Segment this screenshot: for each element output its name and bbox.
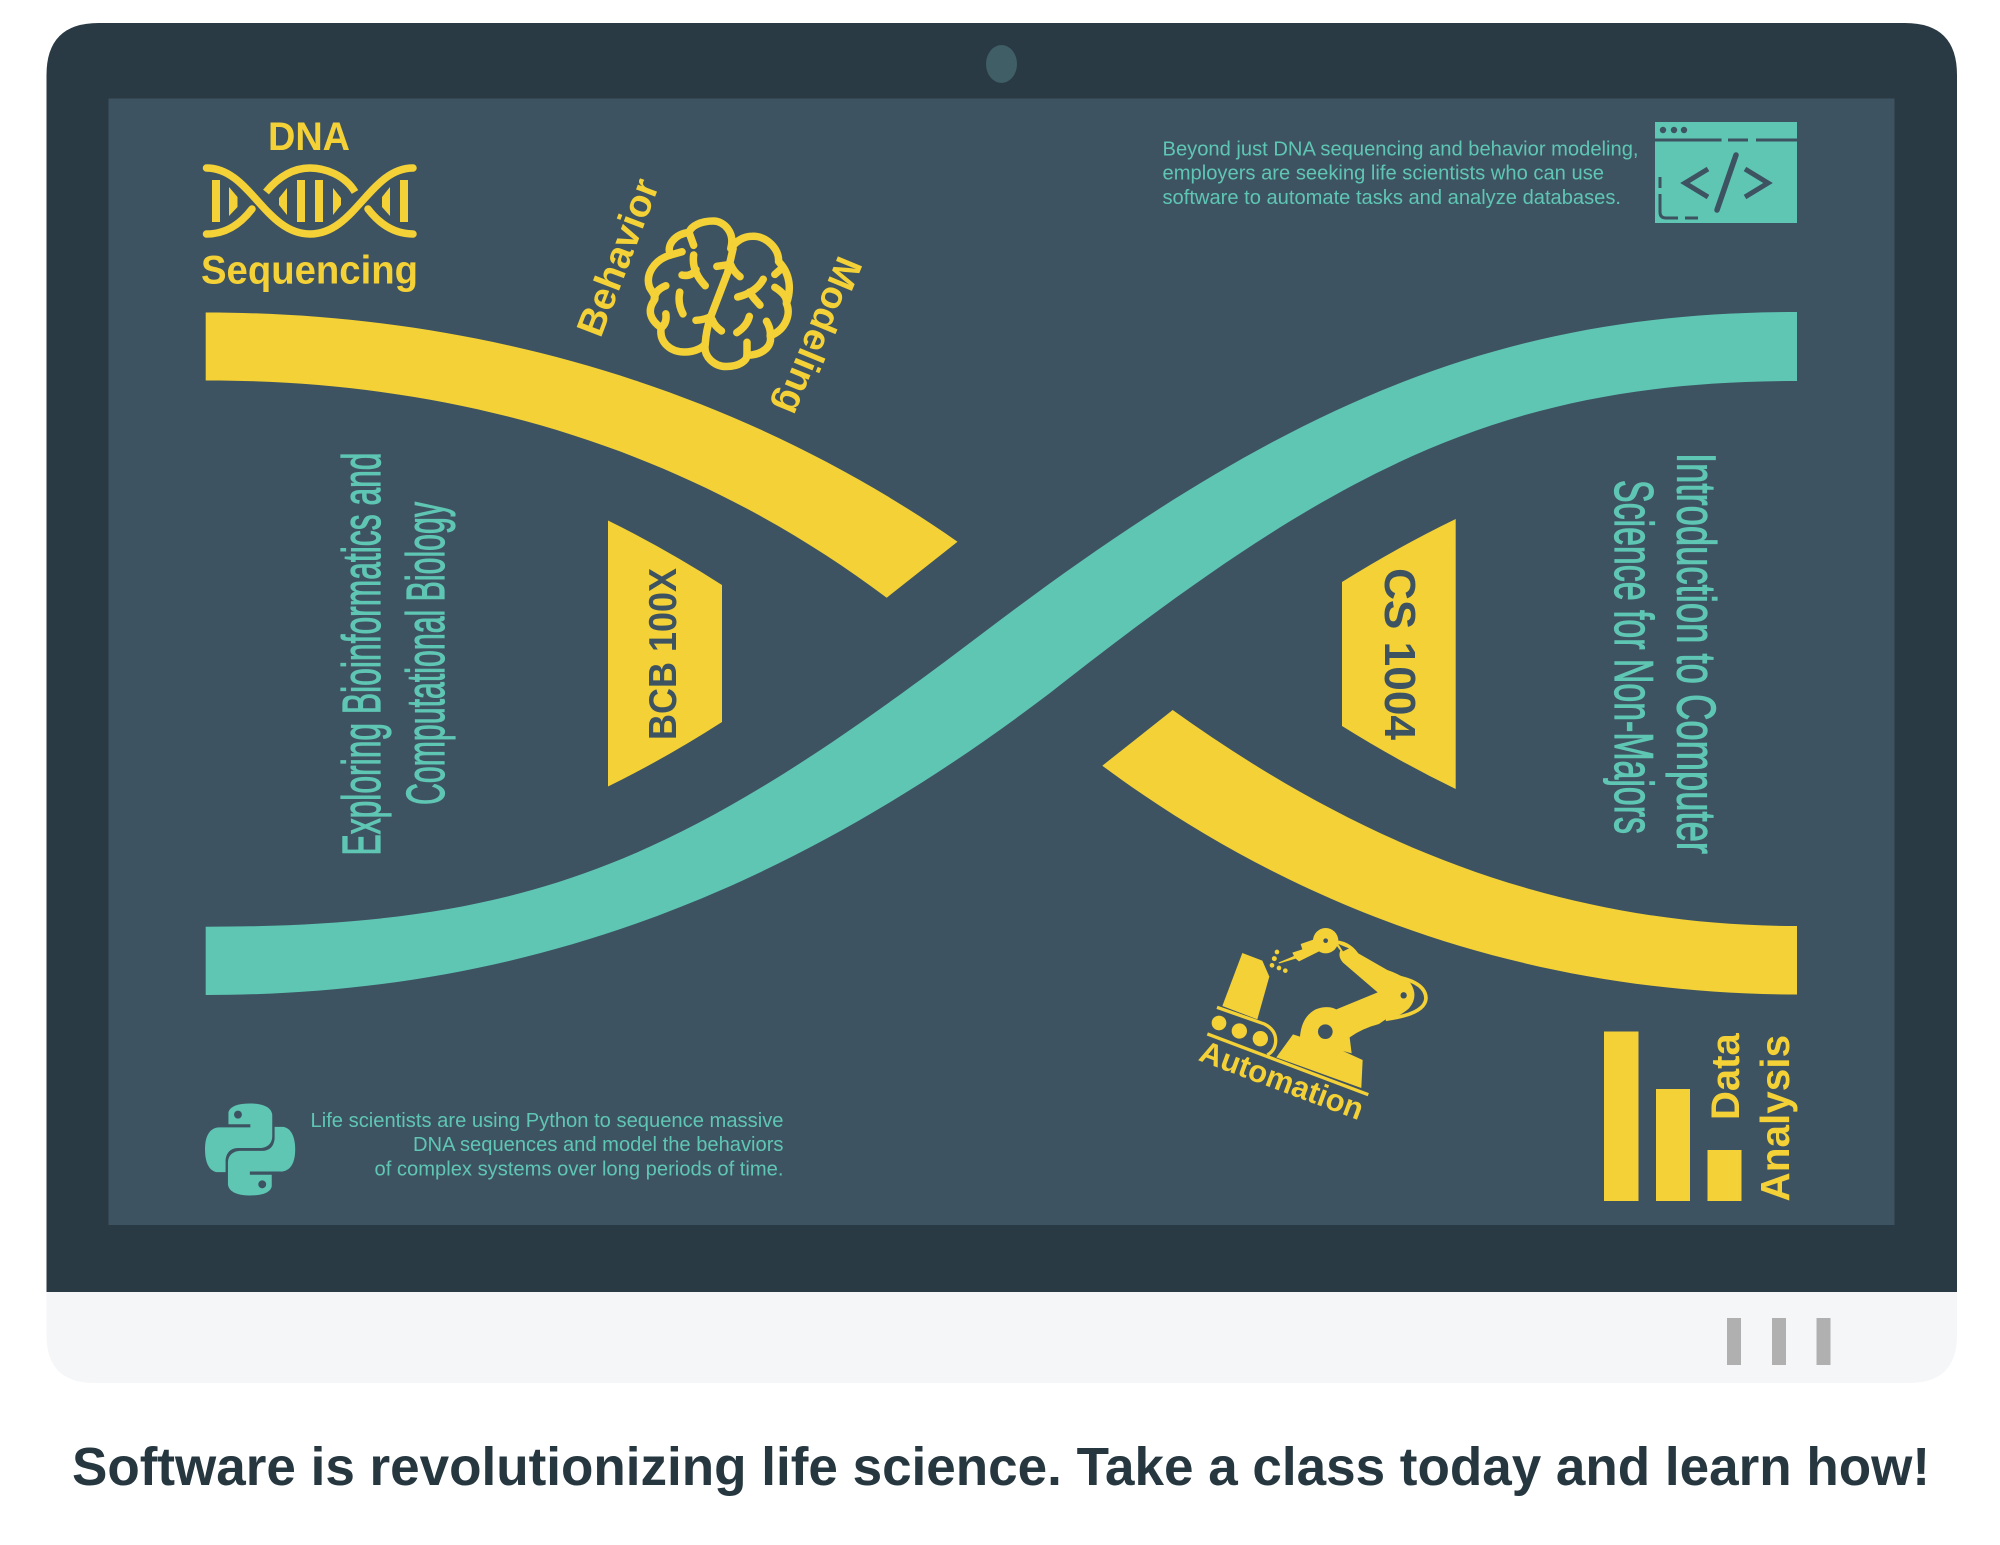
- teal DNA ribbon: [206, 312, 1797, 995]
- course title: Exploring Bioinformatics and Computational Biology: [332, 452, 456, 856]
- icon: DNA helix: [206, 168, 413, 234]
- DNA sequencing label and icon: [201, 115, 418, 292]
- course title: Exploring Bioinformatics and Computational Biology: Exploring Bioinformatics and: [332, 452, 392, 856]
- chin buttons: [1727, 1318, 1830, 1365]
- label: Automation: Automation: [1195, 1034, 1369, 1127]
- heading: Sequencing: Sequencing: [201, 248, 418, 292]
- text block: beyond DNA sequencing: [1162, 138, 1638, 209]
- label: Analysis: Analysis: [1752, 1035, 1798, 1202]
- heading: DNA: DNA: [268, 115, 350, 159]
- text block: life scientists using Python: DNA sequences and model the behaviors: [413, 1134, 784, 1156]
- yellow ribbon upper left: [206, 312, 957, 598]
- automation icon and label: [1195, 928, 1426, 1127]
- webcam: [986, 45, 1017, 83]
- course title: Exploring Bioinformatics and Computational Biology: Computational Biology: [396, 502, 456, 805]
- headline: Software is revolutionizing life science. Take a class today and learn how!: [72, 1437, 1930, 1497]
- course title: Introduction to Computer Science for Non-Majors: Science for Non-Majors: [1603, 480, 1665, 834]
- icon: robot arm and conveyor: [1207, 928, 1426, 1095]
- text block: beyond DNA sequencing: Beyond just DNA sequencing and behavior modeling,: [1162, 138, 1638, 160]
- text block: beyond DNA sequencing: employers are seeking life scientists who can use: [1162, 162, 1604, 184]
- monitor bezel: [46, 23, 1957, 1292]
- text block: life scientists using Python: of complex systems over long periods of time.: [374, 1158, 784, 1180]
- course tag: CS 1004: [1342, 519, 1456, 789]
- icon: code window: [1655, 122, 1797, 223]
- label: Data: Data: [1704, 1033, 1748, 1120]
- text block: life scientists using Python: Life scientists are using Python to sequence massive: [310, 1110, 784, 1132]
- course tag: BCB 100X: [608, 520, 722, 786]
- bar chart: data analysis: [1604, 1032, 1798, 1202]
- course title: Introduction to Computer Science for Non-Majors: [1603, 453, 1728, 854]
- text block: beyond DNA sequencing: software to automate tasks and analyze databases.: [1162, 187, 1621, 209]
- yellow ribbon lower right: [1102, 710, 1797, 994]
- course title: Introduction to Computer Science for Non-Majors: Introduction to Computer: [1666, 453, 1728, 854]
- monitor chin: [46, 1200, 1957, 1383]
- icon: brain: [648, 221, 789, 367]
- label: Modeling: Modeling: [767, 251, 869, 421]
- label: Behavior: Behavior: [569, 173, 668, 342]
- icon: Python logo: [205, 1104, 295, 1195]
- behavior modeling label and icon: [569, 173, 869, 421]
- screen panel: [108, 98, 1894, 1225]
- text block: life scientists using Python: [310, 1110, 784, 1180]
- course tag: BCB 100X: BCB 100X: [642, 568, 685, 740]
- course tag: CS 1004: CS 1004: [1375, 568, 1424, 741]
